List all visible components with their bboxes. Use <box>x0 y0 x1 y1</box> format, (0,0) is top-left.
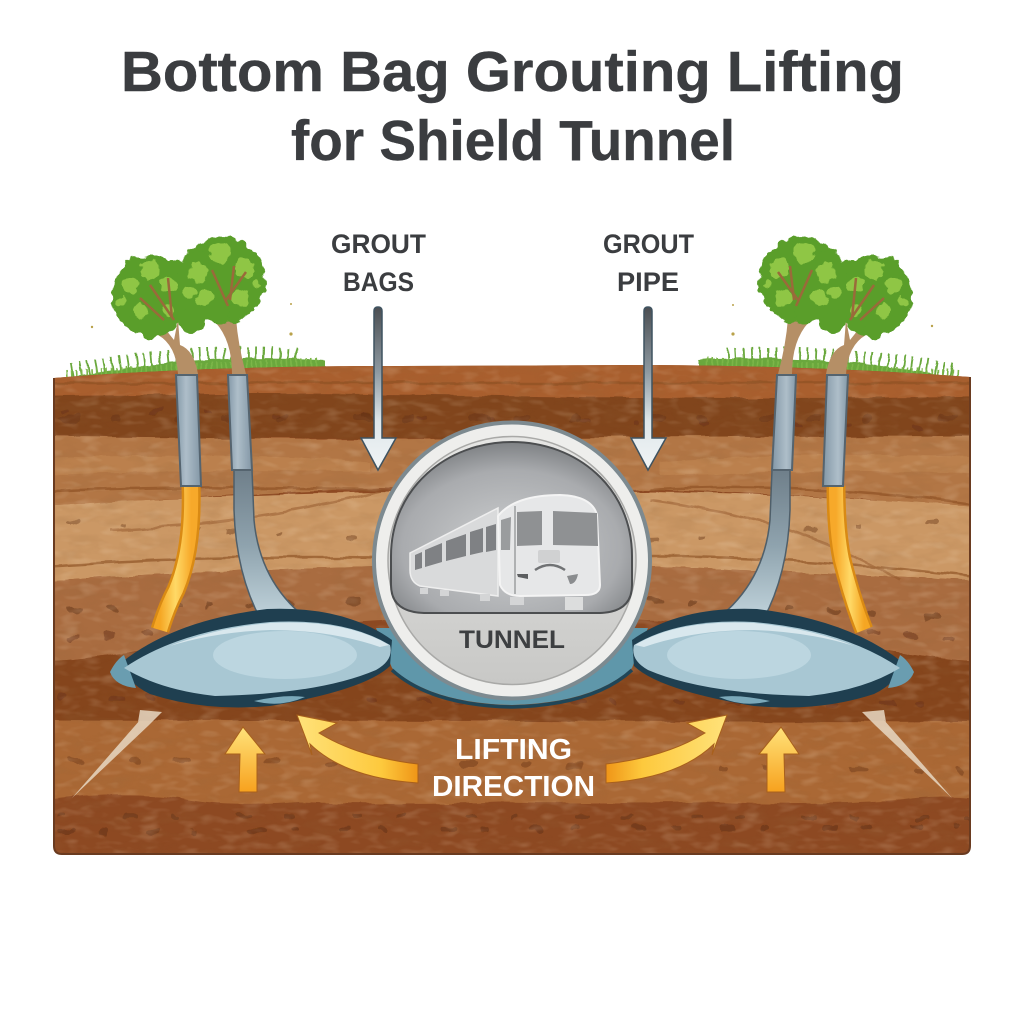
grass left <box>62 356 325 382</box>
callout: grout pipe: GROUT <box>603 229 694 259</box>
callout: grout pipe: PIPE <box>617 267 679 297</box>
soil bands and lines <box>30 383 1000 580</box>
lifting arrows left <box>72 710 418 798</box>
lifting arrows right <box>606 710 952 798</box>
soil cross-section <box>30 355 1000 865</box>
title: for Shield Tunnel <box>291 109 735 173</box>
trees left <box>112 236 267 374</box>
title <box>121 40 904 173</box>
callout: grout bags: BAGS <box>343 267 414 297</box>
grout connector beneath tunnel <box>376 628 648 707</box>
tunnel window <box>391 442 632 613</box>
sleeve inner left <box>228 375 252 470</box>
soil texture overlay <box>61 492 890 577</box>
grout bag right <box>632 609 914 708</box>
yellow grout hose left <box>160 486 191 630</box>
grout pipes and sleeves left <box>160 375 311 630</box>
soil block border <box>54 377 970 854</box>
callout: grout bags: GROUT <box>331 229 426 259</box>
lifting direction label <box>432 734 595 803</box>
grout bag left <box>110 609 392 708</box>
title: Bottom Bag Grouting Lifting <box>121 40 904 104</box>
layer: topsoil <box>55 365 969 400</box>
layer: dark soil band <box>55 650 969 662</box>
layer: light sand <box>30 492 1000 582</box>
layer: lower sand <box>30 720 1000 804</box>
layer: dark clay <box>30 394 1000 438</box>
layer: brown soil <box>30 566 1000 662</box>
arrow: grout pipe <box>631 307 666 470</box>
tunnel ring <box>374 422 650 698</box>
soil speckles <box>60 410 970 832</box>
train <box>410 495 600 610</box>
lifting direction label: DIRECTION <box>432 771 595 803</box>
lifting direction label: LIFTING <box>455 734 572 766</box>
grass right <box>699 356 962 382</box>
grey grout pipe left <box>234 470 311 622</box>
callout: grout pipe <box>603 229 694 470</box>
callout: grout bags <box>331 229 426 470</box>
trees right <box>757 236 912 374</box>
tunnel <box>374 422 650 698</box>
tunnel label: TUNNEL <box>459 626 565 654</box>
sleeve outer left <box>176 375 201 486</box>
layer: sandy clay <box>30 436 1000 508</box>
grout pipes and sleeves right <box>713 375 864 630</box>
arrow: grout bags <box>361 307 396 470</box>
soil specks in the air <box>91 303 933 336</box>
